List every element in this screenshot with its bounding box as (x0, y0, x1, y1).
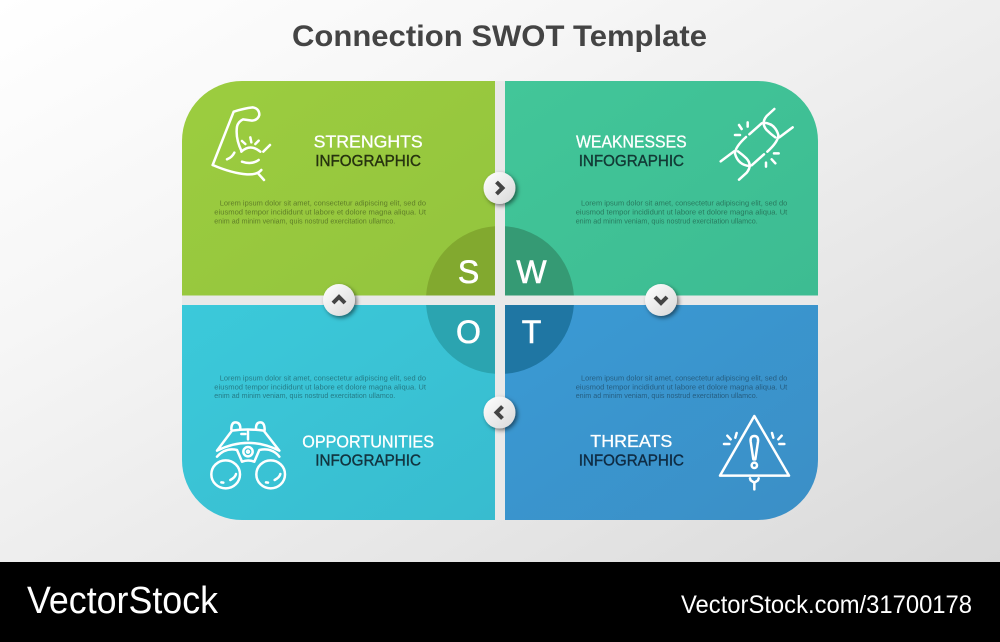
letter S: S (458, 254, 479, 290)
body text: threats (576, 374, 788, 400)
body text: weaknesses: Lorem ipsum dolor sit amet, consectetur adipiscing elit, sed do (581, 199, 787, 208)
footer bar (0, 562, 1000, 642)
body text: strengths: eiusmod tempor incididunt ut labore et dolore magna aliqua. Ut (214, 207, 427, 216)
gap cross between panels (182, 81, 818, 520)
icon: flexed arm (213, 107, 270, 180)
arrow button: down (645, 284, 677, 316)
body text: weaknesses (576, 199, 788, 225)
arrow button: up (323, 284, 355, 316)
body text: threats: Lorem ipsum dolor sit amet, consectetur adipiscing elit, sed do (581, 374, 787, 383)
icon: broken chain (721, 109, 793, 180)
quadrant T (505, 305, 574, 374)
letter O: O (456, 314, 481, 350)
body text: strengths (214, 199, 427, 225)
subheading: opportunities: INFOGRAPHIC (315, 453, 421, 470)
panel: threats (505, 305, 818, 520)
body text: threats: eiusmod tempor incididunt ut labore et dolore magna aliqua. Ut (576, 382, 788, 391)
body text: opportunities (214, 374, 427, 400)
icon: warning triangle (720, 416, 789, 489)
quadrant S (426, 226, 495, 296)
title: Connection SWOT Template (292, 20, 707, 53)
heading: weaknesses: WEAKNESSES (576, 132, 687, 152)
icon: binoculars (211, 422, 285, 488)
heading: threats: THREATS (590, 431, 672, 451)
panel background: opportunities (182, 305, 495, 520)
footer image id: VectorStock.com/31700178 (681, 591, 972, 619)
panel background: threats (505, 305, 818, 520)
panel: weaknesses (505, 81, 818, 296)
body text: opportunities: Lorem ipsum dolor sit amet, consectetur adipiscing elit, sed do (220, 374, 426, 383)
body text: weaknesses: eiusmod tempor incididunt ut labore et dolore magna aliqua. Ut (576, 207, 788, 216)
subheading: weaknesses: INFOGRAPHIC (579, 153, 684, 170)
arrow button: right (484, 172, 516, 204)
heading: opportunities: OPPORTUNITIES (302, 431, 434, 451)
quadrant W (505, 226, 574, 296)
quadrant O (426, 305, 495, 374)
subheading: threats: INFOGRAPHIC (579, 453, 684, 470)
subheading: strengths: INFOGRAPHIC (315, 153, 421, 170)
body text: threats: enim ad minim veniam, quis nostrud exercitation ullamco. (576, 391, 758, 400)
body text: opportunities: eiusmod tempor incididunt ut labore et dolore magna aliqua. Ut (214, 382, 427, 391)
panel: opportunities (182, 305, 495, 520)
letter T: T (522, 314, 541, 350)
center SWOT circle (426, 226, 574, 374)
footer logo: VectorStock (27, 580, 219, 622)
body text: strengths: enim ad minim veniam, quis nostrud exercitation ullamco. (214, 216, 395, 225)
letter W: W (516, 254, 547, 290)
panel: strengths (182, 81, 495, 296)
arrow button: left (484, 396, 516, 428)
body text: weaknesses: enim ad minim veniam, quis nostrud exercitation ullamco. (576, 216, 758, 225)
panel background: weaknesses (505, 81, 818, 296)
body text: opportunities: enim ad minim veniam, quis nostrud exercitation ullamco. (214, 391, 395, 400)
heading: strengths: STRENGHTS (314, 132, 423, 152)
panel background: strengths (182, 81, 495, 296)
body text: strengths: Lorem ipsum dolor sit amet, consectetur adipiscing elit, sed do (220, 199, 426, 208)
